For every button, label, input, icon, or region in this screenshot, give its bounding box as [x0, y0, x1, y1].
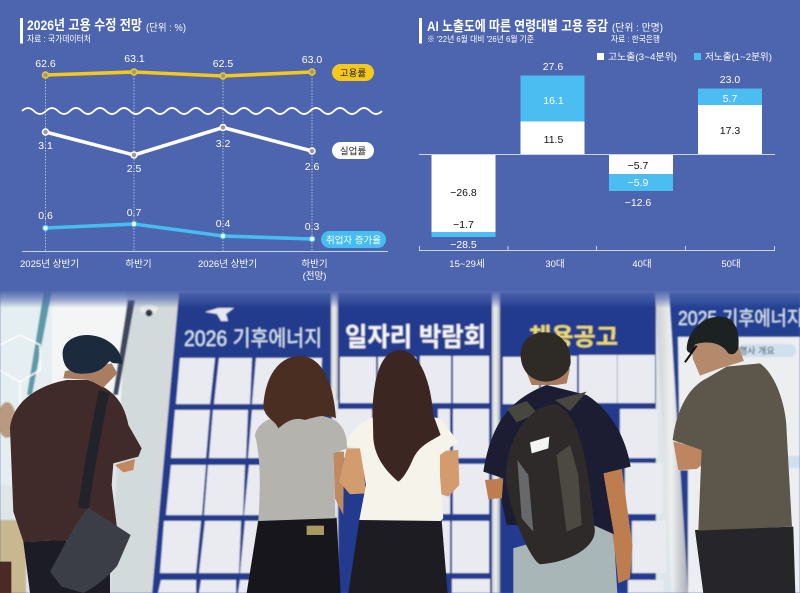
- bar: 40s: −5.9: [628, 177, 649, 189]
- job posting sheets: board 2: [338, 356, 490, 593]
- bar: 15~29: −26.8: [450, 187, 477, 199]
- display board 4: [669, 292, 800, 593]
- bar: 50s: [698, 74, 762, 154]
- legend pill: employed persons growth: [321, 231, 386, 248]
- heading: employment forecast: (단위 : %): [146, 21, 186, 34]
- x axis labels: 하반기: [301, 258, 328, 270]
- heading: AI exposure: AI 노출도에 따른 연령대별 고용 증감: [427, 18, 608, 34]
- person: brown sweater with shoulder bag: [0, 335, 142, 593]
- heading: AI exposure: 자료 : 한국은행: [611, 34, 660, 44]
- x axis labels: [20, 258, 328, 282]
- bar: 40s: [609, 154, 673, 209]
- legend pill: unemployment rate: [332, 142, 374, 159]
- line: unemployment rate: 3.1: [38, 140, 53, 152]
- bar: 40s: −5.7: [628, 160, 649, 172]
- heading: employment forecast: 2026년 고용 수정 전망: [27, 17, 142, 33]
- display board 3: [500, 292, 656, 593]
- bar: 50s: 5.7: [723, 93, 737, 105]
- pole: [492, 292, 500, 593]
- person: white t-shirt and long hair: [339, 350, 459, 593]
- bar: 15~29: −1.7: [453, 219, 474, 231]
- bar: 15~29: [432, 154, 496, 251]
- pole: [655, 292, 688, 593]
- bar: 40s: −12.6: [625, 197, 651, 209]
- legend pill: employment rate: [332, 64, 374, 81]
- heading: AI exposure: [419, 18, 663, 44]
- display board 3: 채용공고: [529, 324, 618, 351]
- display board 1: 2026 기후에너지: [184, 326, 322, 351]
- bar: 30s: [520, 61, 584, 154]
- line: employed persons growth: 0.4: [216, 218, 230, 230]
- heading: AI exposure: (단위 : 만명): [612, 21, 663, 34]
- job posting sheets: board 1: [158, 358, 322, 593]
- line: unemployment rate: 2.5: [127, 163, 141, 175]
- bar: 30s: 27.6: [543, 61, 563, 73]
- axis break wave: [22, 108, 382, 114]
- pole: [331, 292, 338, 400]
- photo: job fair visitors reading postings: [0, 278, 800, 593]
- line: unemployment rate: [38, 124, 319, 175]
- photo scenery: [0, 285, 800, 593]
- x axis labels: 15~29세: [449, 259, 485, 270]
- line: employment rate: 62.6: [35, 58, 56, 70]
- legend: exposure groups: 저노출(1~2분위): [705, 51, 772, 63]
- bar: 30s: 11.5: [544, 134, 563, 146]
- job posting sheets: board 3: [503, 355, 666, 593]
- heading: employment forecast: [20, 17, 186, 44]
- bar: 30s: 16.1: [543, 95, 564, 107]
- line: employed persons growth: 0.3: [305, 221, 319, 233]
- legend: exposure groups: [597, 51, 772, 63]
- bar: 50s: 17.3: [720, 125, 740, 137]
- legend pill: employed persons growth: 취업자 증가율: [326, 234, 381, 246]
- x axis labels: 2025년 상반기: [20, 259, 79, 270]
- x axis labels: 30대: [545, 259, 565, 270]
- bar: 50s: 23.0: [720, 74, 740, 86]
- person: navy shirt with backpack: [483, 332, 632, 593]
- x axis labels: 2026년 상반기: [198, 259, 257, 270]
- heading: employment forecast: 자료 : 국가데이터처: [27, 33, 91, 44]
- icon: security camera: [140, 304, 158, 316]
- line: employment rate: 63.1: [124, 53, 145, 65]
- bar: 15~29: −28.5: [450, 239, 477, 251]
- legend: exposure groups: 고노출(3~4분위): [608, 51, 677, 63]
- x axis labels: 하반기: [125, 258, 152, 270]
- chart guide lines and axis: [22, 72, 388, 252]
- panel: AI exposure bar chart: [419, 18, 775, 270]
- line: unemployment rate: 2.6: [305, 161, 319, 173]
- person: olive t-shirt with glasses: [673, 317, 795, 593]
- heading: AI exposure: ※ '22년 6월 대비 '26년 6월 기준: [427, 34, 534, 44]
- x axis labels: 50대: [721, 259, 741, 270]
- line: employment rate: 63.0: [302, 54, 322, 66]
- window and wall: [0, 285, 800, 593]
- x axis labels: (전망): [303, 271, 326, 282]
- display board 2: [338, 292, 493, 593]
- line: employed persons growth: 0.7: [127, 207, 141, 219]
- line: unemployment rate: 3.2: [216, 138, 230, 150]
- line: employed persons growth: 0.6: [38, 210, 53, 222]
- line: employment rate: 62.5: [213, 58, 233, 70]
- top fade into the chart background: [0, 278, 800, 308]
- display board 1: [144, 292, 332, 593]
- person: grey t-shirt: [247, 356, 347, 593]
- display board 2: 일자리 박람회: [345, 322, 486, 352]
- chart axes: [419, 154, 775, 250]
- legend pill: unemployment rate: 실업률: [340, 146, 366, 158]
- panel: employment forecast line chart: [20, 17, 388, 282]
- line: employed persons growth: [38, 207, 319, 242]
- display board 4: 행사 개요: [739, 345, 775, 356]
- x axis labels: 40대: [632, 259, 652, 270]
- legend pill: employment rate: 고용률: [340, 68, 366, 80]
- x axis labels: [449, 259, 741, 270]
- line: employment rate: [35, 53, 322, 79]
